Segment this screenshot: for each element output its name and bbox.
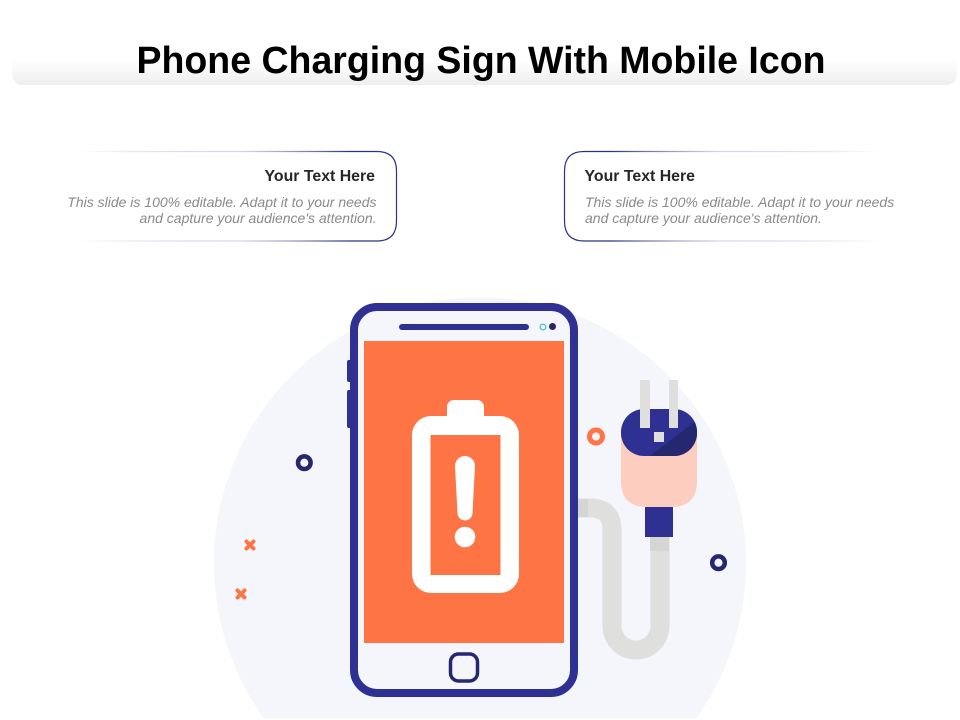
icon: navy ring right (712, 556, 725, 569)
icon: plug (621, 380, 697, 537)
right box body: This slide is 100% editable. Adapt it to your needs (585, 194, 894, 210)
left box heading: Your Text Here (264, 168, 375, 185)
speaker (399, 324, 529, 330)
camera dots (540, 324, 546, 330)
right box outline (564, 152, 880, 241)
right box body: and capture your audience's attention. (585, 210, 822, 226)
panel: right text box (564, 152, 894, 241)
title: Phone Charging Sign With Mobile Icon (136, 40, 826, 82)
plug prongs (640, 380, 650, 428)
icon: orange cross bottom (238, 590, 244, 598)
icon: smartphone (347, 307, 574, 693)
background circle (214, 297, 746, 718)
left box body: This slide is 100% editable. Adapt it to your needs (67, 194, 376, 210)
icon: charging cable (578, 499, 669, 650)
left box outline (80, 152, 396, 241)
panel: left text box (67, 152, 396, 241)
plug head (621, 409, 697, 456)
home button (450, 654, 478, 681)
right box heading: Your Text Here (584, 168, 695, 185)
icon: low battery (412, 400, 519, 593)
side buttons (347, 360, 353, 382)
icon: orange cross top (246, 542, 254, 548)
exclamation mark (455, 456, 475, 520)
title bar (12, 60, 957, 85)
plug connector (645, 507, 673, 537)
phone body (354, 307, 574, 693)
screen (364, 341, 564, 643)
icon: navy ring left (298, 456, 311, 469)
left box body: and capture your audience's attention. (140, 210, 376, 226)
plug body (621, 432, 697, 507)
icon: orange ring (590, 430, 602, 443)
